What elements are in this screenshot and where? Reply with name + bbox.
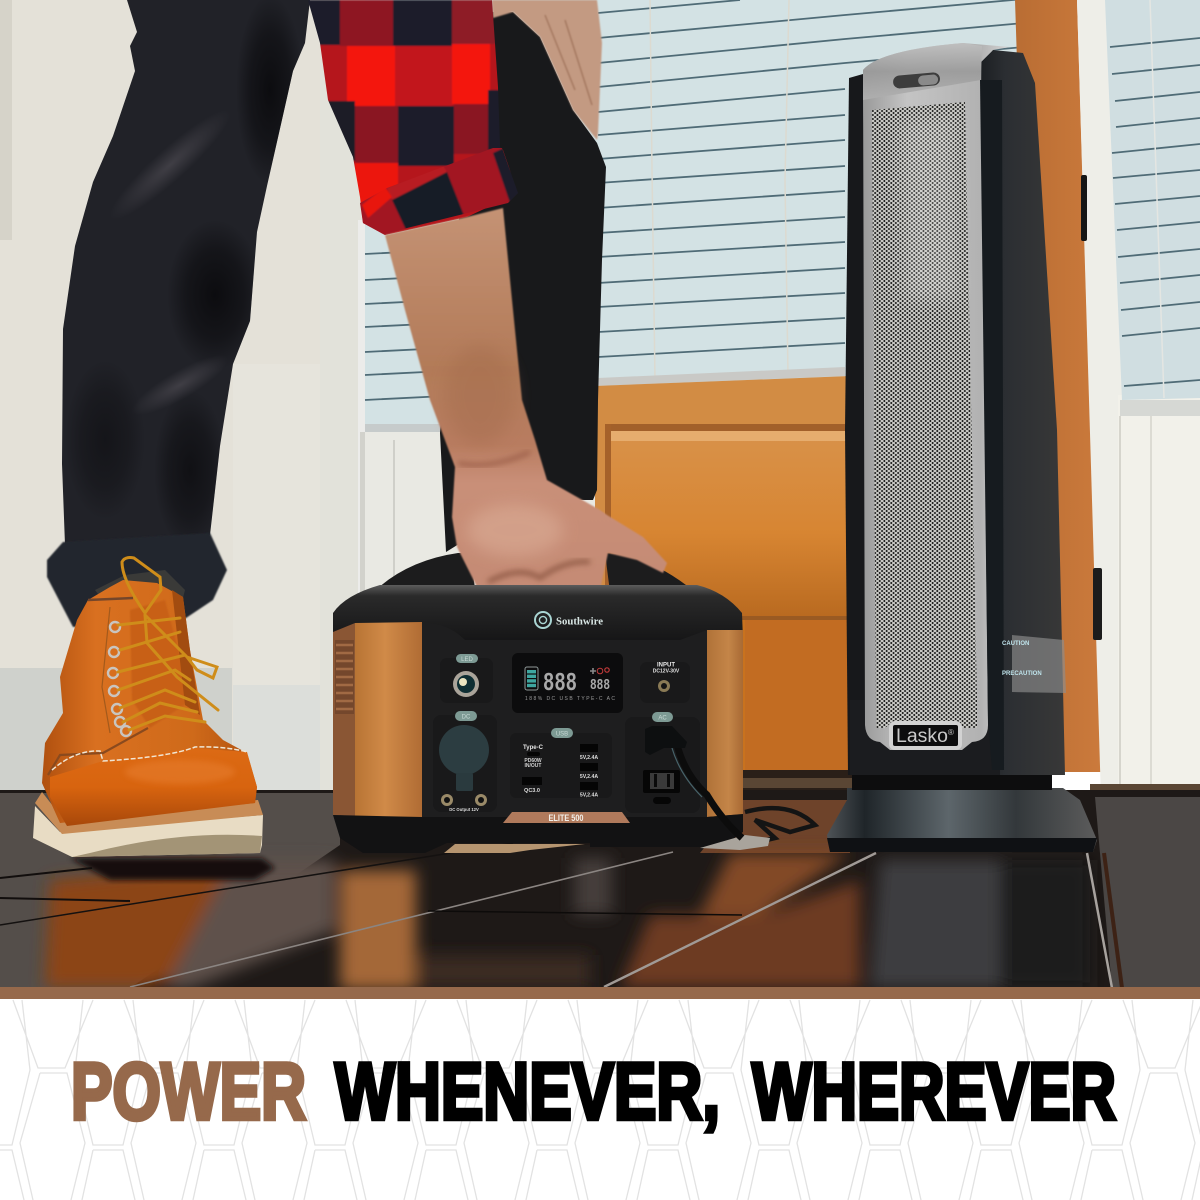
Lasko badge: Lasko [896, 726, 947, 747]
DC module [433, 711, 497, 812]
loose power cord coil [745, 808, 815, 845]
floor with plank reflections [0, 790, 1200, 990]
top shell [333, 585, 743, 640]
door hinges [1081, 175, 1102, 640]
hand highlight [467, 504, 563, 556]
orange wooden door panel [595, 376, 850, 776]
caution label [1002, 635, 1066, 693]
row 1 [347, 46, 395, 106]
brown floor behind cord [700, 800, 850, 853]
tower heater [827, 43, 1097, 852]
boot tongue [130, 600, 192, 728]
right door frame in orange [1015, 0, 1101, 772]
left body strip [845, 74, 870, 775]
battery icon [525, 667, 538, 690]
perforated grille [872, 102, 977, 728]
AC plug and cable [645, 726, 742, 838]
photo background: interior wall, blinds and doors [0, 0, 1200, 800]
knuckle shadows [488, 562, 590, 582]
USB module [510, 728, 612, 798]
top control window [893, 72, 941, 89]
rear trouser leg [440, 12, 606, 552]
blind cords [650, 0, 789, 380]
USB module: 5V,2.4A [580, 774, 598, 780]
boot laces [118, 558, 218, 730]
Southwire logo: Southwire [556, 616, 603, 628]
sole underside shadow [72, 835, 262, 857]
wrist crease [458, 452, 530, 465]
ELITE 500 badge [503, 812, 630, 824]
LED module: LED [461, 657, 474, 663]
input module: INPUT [657, 662, 675, 668]
caution label: PRECAUTION [1002, 671, 1042, 677]
USB module: QC3.0 [524, 788, 540, 794]
hexagon background panel [0, 999, 1200, 1200]
rolled shirt cuff [360, 148, 518, 235]
threshold [743, 770, 1200, 800]
title [71, 1047, 1116, 1137]
heater side body [980, 50, 1065, 775]
USB module: 5V,2.4A [580, 792, 598, 798]
handle inner sliver [601, 586, 622, 591]
input module [640, 662, 690, 703]
rolled trouser cuff [47, 533, 227, 627]
white door casing and door [1077, 0, 1200, 800]
silver top cap shade [863, 43, 982, 100]
main readout: 888 [543, 668, 577, 698]
finger creases [545, 15, 592, 105]
vamp flap seam [48, 728, 148, 775]
work boot [33, 558, 263, 857]
hairy forearm shading [445, 345, 515, 445]
power station [333, 585, 815, 853]
forearm and gripping hand [385, 208, 667, 590]
wainscot below blinds [360, 432, 600, 799]
title: WHENEVER, [335, 1047, 720, 1137]
far side flank [172, 590, 200, 715]
grille glare [900, 115, 958, 300]
black texture band [980, 80, 1004, 770]
copper left panel [333, 622, 422, 817]
ELITE 500 badge: ELITE 500 [548, 813, 584, 824]
input module: DC12V-30V [653, 668, 680, 674]
carry handle [378, 553, 695, 592]
DC module: DC [462, 714, 471, 720]
left wall [0, 0, 366, 800]
DC module: DC Output 12V [449, 807, 479, 812]
USB module: Type-C [523, 745, 544, 751]
collar edge [88, 598, 133, 600]
tan floor glimpse [444, 844, 585, 853]
cord plug end [700, 835, 770, 850]
port legend row: 188% DC USB TYPE-C AC [525, 696, 615, 702]
secondary readout: 888 [590, 677, 610, 694]
status icons [590, 668, 609, 674]
caution label: CAUTION [1002, 641, 1029, 647]
USB module: USB [556, 732, 568, 738]
window blinds centre [365, 0, 1024, 432]
boot shaft [42, 580, 257, 823]
USB module: IN/OUT [525, 763, 541, 769]
moc toe cap [50, 748, 257, 826]
USB module: PD60W [524, 758, 542, 764]
plaid flannel sleeve [300, 0, 510, 240]
front trouser leg [47, 0, 320, 627]
AC module: AC [658, 716, 667, 722]
base lower lip [827, 838, 1097, 852]
boot eyelets [108, 622, 131, 736]
row 0 [308, 0, 341, 46]
Southwire logo [535, 612, 603, 628]
Lasko badge [889, 721, 962, 750]
slat shadow lines [365, 0, 1024, 400]
front lower body [850, 700, 1000, 775]
quarter stitch line [102, 607, 110, 733]
heater base [827, 788, 1097, 852]
lower black shell [333, 814, 743, 853]
boot welt [35, 792, 263, 834]
left bottom rail [365, 424, 445, 432]
row 2 [328, 100, 356, 162]
LCD display [512, 653, 623, 713]
sock [95, 570, 185, 610]
Lasko badge: ® [948, 728, 954, 737]
USB module: 5V,2.4A [580, 755, 598, 761]
heater neck [852, 772, 1052, 790]
hand resting on hip [492, 0, 602, 140]
AC module [625, 712, 700, 813]
blind bottom rail [598, 367, 845, 386]
boot sole [33, 806, 263, 857]
toe highlight [125, 760, 235, 784]
copper divider bar [0, 987, 1200, 999]
right window blinds [1105, 0, 1200, 400]
copper right panel [707, 630, 743, 817]
centre control face [422, 623, 707, 817]
toe stitching [52, 747, 247, 770]
LED module [440, 654, 493, 703]
silver front frame [863, 43, 1010, 750]
row 3 [355, 163, 398, 223]
title: POWER [71, 1047, 306, 1137]
